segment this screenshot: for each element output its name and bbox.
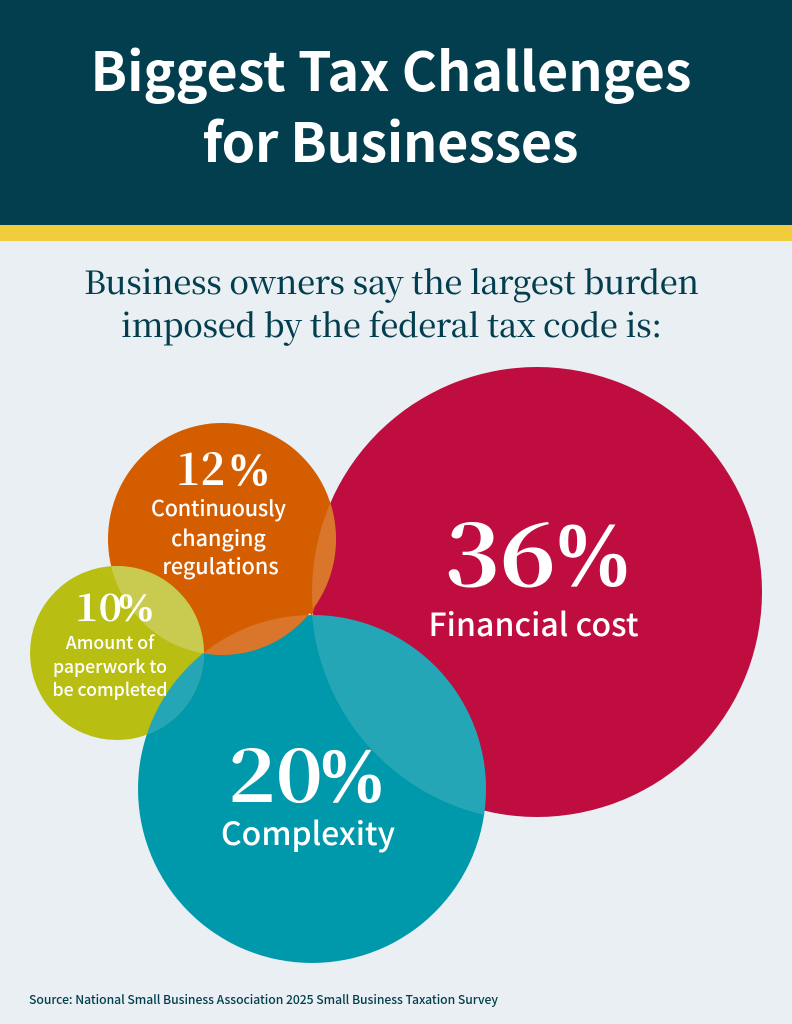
subtitle bbox=[84, 258, 699, 347]
label: 36% financial cost: 36 bbox=[444, 486, 556, 612]
overlap: regulations and financial cost bbox=[312, 504, 336, 610]
bubble chart bbox=[30, 367, 762, 963]
label: 10% amount of paperwork: 10 bbox=[75, 577, 122, 632]
header band bbox=[0, 0, 792, 241]
subtitle: imposed by the federal tax code is: bbox=[121, 301, 662, 347]
label: 12% continuously changing regulations: 12 bbox=[176, 433, 225, 498]
overlap: complexity and financial cost bbox=[312, 615, 486, 815]
circle: paperwork bbox=[30, 566, 204, 740]
label: 36% financial cost: Financial cost bbox=[428, 600, 639, 646]
overlap: paperwork and regulations bbox=[111, 566, 204, 654]
circle: complexity bbox=[138, 615, 486, 963]
circle: regulations junction patch bbox=[304, 606, 315, 616]
label: 10% amount of paperwork bbox=[52, 577, 168, 702]
label: 12% continuously changing regulations: % bbox=[227, 444, 271, 496]
title: Biggest Tax Challenges bbox=[90, 30, 692, 107]
circle: regulations bbox=[108, 423, 336, 655]
overlap: paperwork and complexity bbox=[146, 652, 204, 735]
label: 10% amount of paperwork: be completed bbox=[52, 676, 168, 702]
subtitle: Business owners say the largest burden bbox=[84, 258, 699, 304]
label: 12% continuously changing regulations: changing bbox=[171, 522, 266, 553]
label: 12% continuously changing regulations: regulations bbox=[162, 550, 279, 581]
label: 20% complexity: % bbox=[316, 732, 388, 819]
label: 20% complexity: Complexity bbox=[221, 809, 395, 855]
label: 36% financial cost bbox=[428, 486, 639, 646]
label: 10% amount of paperwork: paperwork to bbox=[53, 653, 167, 679]
source: Source: National Small Business Association 2025 Small Business Taxation Survey bbox=[29, 990, 498, 1008]
title bbox=[90, 30, 692, 178]
title: for Businesses bbox=[202, 101, 578, 178]
label: 36% financial cost: % bbox=[551, 504, 634, 606]
label: 20% complexity bbox=[221, 718, 395, 855]
label: 12% continuously changing regulations bbox=[151, 433, 286, 581]
label: 20% complexity: 20 bbox=[228, 718, 323, 824]
label: 10% amount of paperwork: % bbox=[116, 585, 156, 630]
label: 10% amount of paperwork: Amount of bbox=[66, 629, 155, 655]
label: 12% continuously changing regulations: Continuously bbox=[151, 492, 286, 523]
overlap: regulations and complexity bbox=[204, 615, 308, 655]
circle: financial cost bbox=[312, 367, 762, 817]
